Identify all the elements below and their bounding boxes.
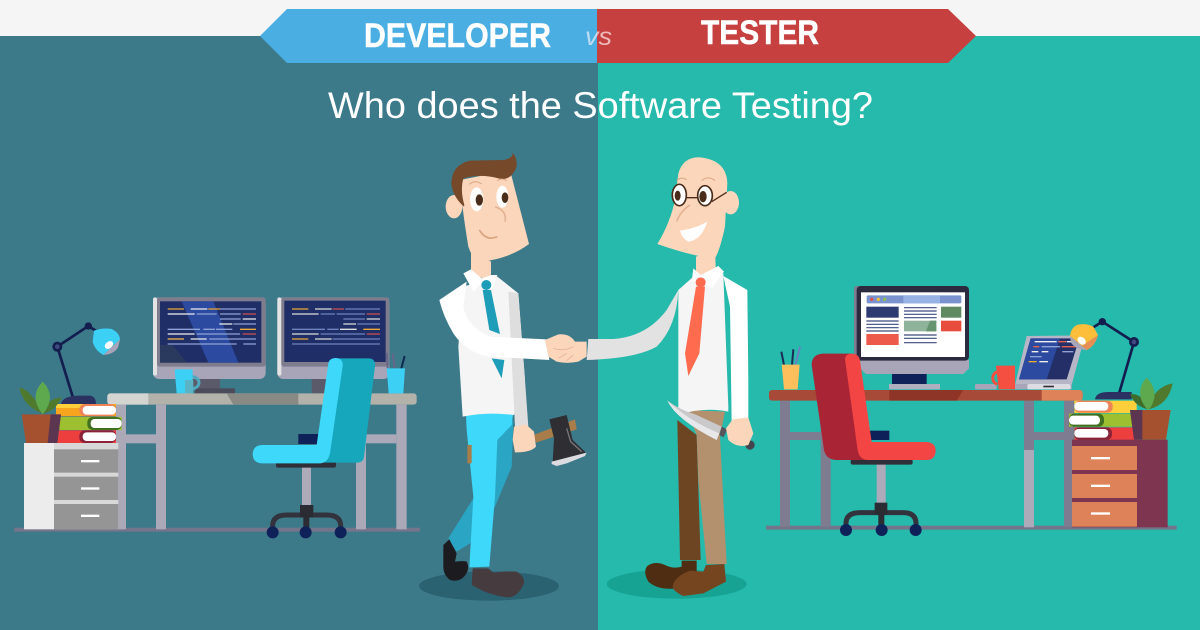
drawer cabinet (24, 443, 118, 529)
tie (481, 280, 504, 378)
drawer cabinet (1072, 440, 1168, 527)
legs (448, 412, 513, 567)
shoes (443, 539, 524, 597)
vs label: vs (585, 23, 612, 51)
banner: developer ribbon (260, 9, 597, 63)
chair (253, 358, 375, 538)
face (460, 170, 529, 262)
shirt body (678, 273, 728, 415)
ground shadow (607, 569, 747, 599)
ground shadow (419, 571, 559, 601)
figure: developer (419, 153, 587, 601)
icon: monitor one (153, 297, 266, 394)
eyes (469, 179, 508, 238)
shirt body (458, 277, 525, 417)
knife (667, 401, 755, 450)
icon: books stack (56, 404, 122, 443)
shoes (645, 561, 726, 596)
chair (812, 354, 936, 536)
smile (680, 222, 707, 242)
icon: desk lamp (52, 322, 120, 404)
collar (463, 269, 497, 292)
scene: tester desk (766, 286, 1177, 536)
desk (769, 390, 1083, 527)
sleeve (723, 276, 748, 422)
icon: laptop (1015, 335, 1085, 389)
handshake (545, 334, 587, 363)
banner: developer ribbon: DEVELOPER (364, 17, 551, 55)
reaching arm (439, 282, 549, 360)
title: Who does the Software Testing? (328, 85, 873, 126)
icon: pencil cup (387, 353, 405, 393)
neck (471, 252, 491, 282)
hair (451, 153, 517, 207)
icon: books stack (1069, 401, 1137, 440)
ear (446, 195, 462, 218)
icon: mug and saucer (975, 366, 1015, 389)
collar (692, 266, 724, 288)
panel: tester background (598, 36, 1200, 630)
icon: desk lamp (1070, 318, 1139, 399)
figure: tester (545, 157, 755, 599)
icon: monitor two (277, 297, 389, 393)
icon: web monitor (854, 286, 969, 389)
vs label (586, 32, 612, 45)
reaching arm (587, 290, 678, 360)
icon: pencil cup (781, 347, 800, 389)
scene: developer desk (14, 297, 420, 538)
vs label: vs (585, 23, 612, 51)
hand (726, 417, 753, 446)
panel: developer background (0, 36, 598, 630)
glasses and eyes (672, 178, 727, 222)
neck (696, 250, 716, 275)
axe (533, 415, 587, 466)
tie (685, 277, 706, 376)
icon: coffee mug (175, 369, 199, 393)
head (657, 157, 727, 258)
hanging arm (508, 292, 528, 427)
icon: potted plant (19, 382, 62, 443)
banner: tester ribbon: TESTER (701, 14, 819, 52)
hand (513, 424, 536, 452)
ear (722, 191, 739, 214)
icon: potted plant (1130, 378, 1173, 440)
banner: tester ribbon (597, 9, 976, 63)
desk (107, 393, 417, 529)
legs (677, 410, 727, 564)
